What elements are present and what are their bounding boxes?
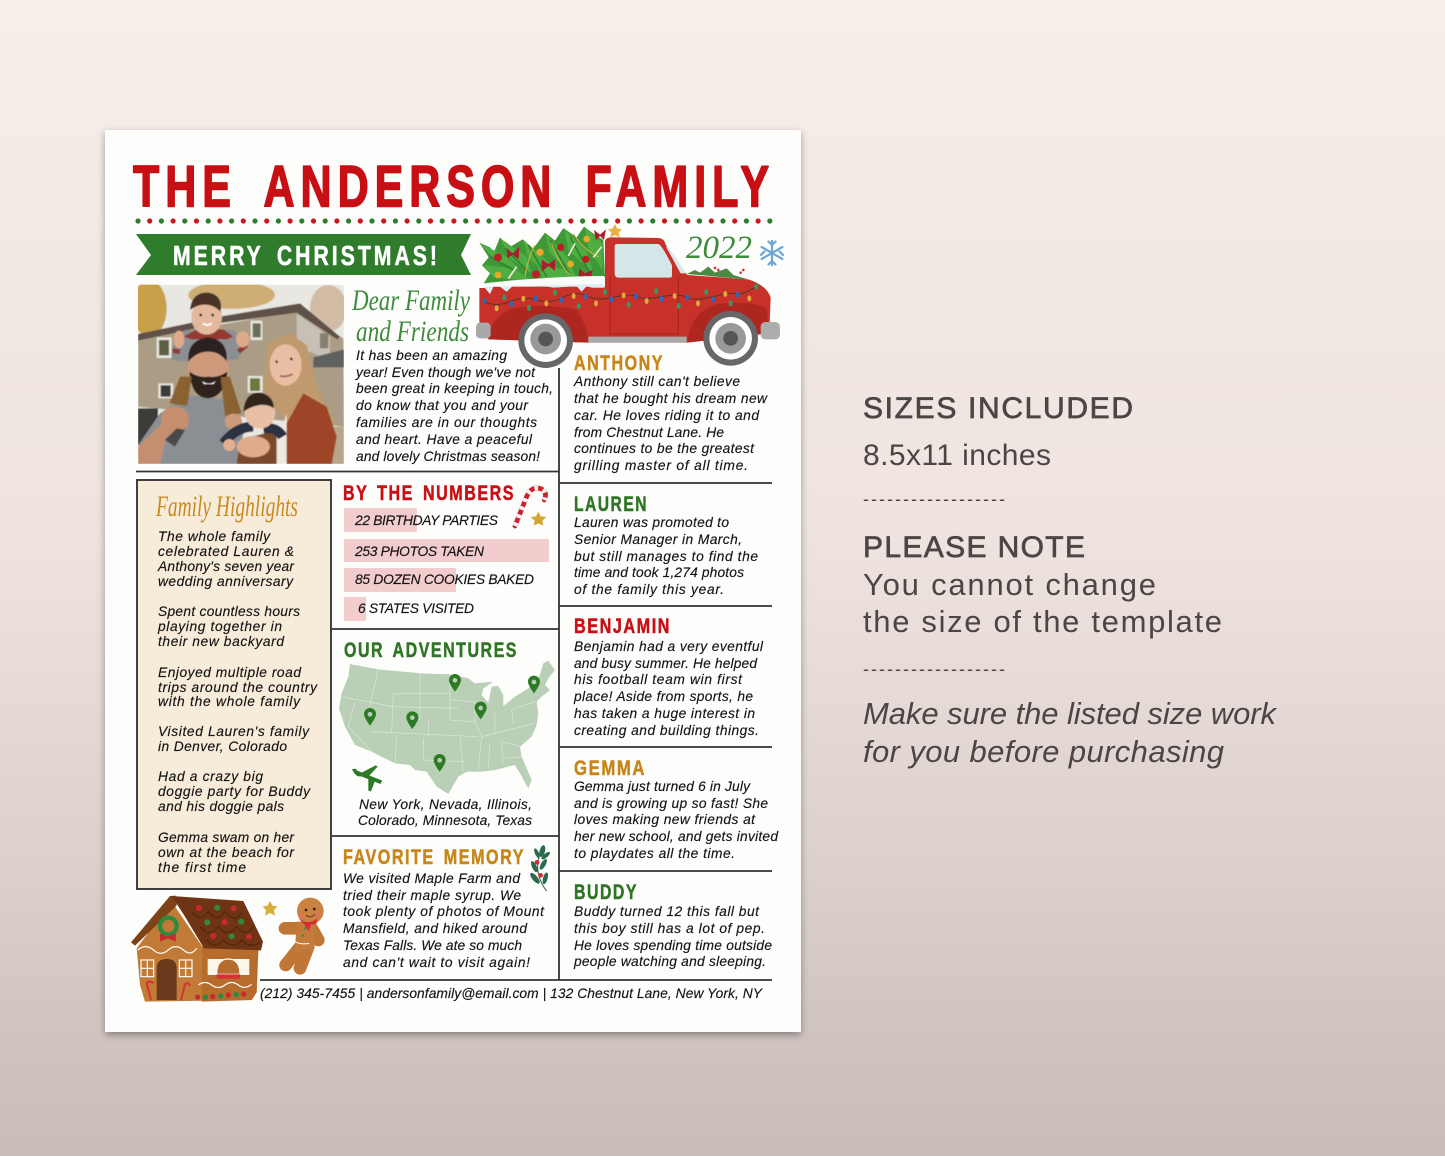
heading: gemma: GEMMA (574, 757, 646, 780)
text block: highlights: doggie party for Buddy (158, 784, 311, 799)
text block: benjamin (573, 639, 764, 738)
text block: lauren (574, 515, 758, 597)
text block: highlights: Gemma swam on her (158, 830, 295, 845)
text block: benjamin: creating and building things. (574, 723, 759, 738)
text block: highlights: celebrated Lauren & (158, 544, 294, 559)
text block: lauren: time and took 1,274 photos (574, 565, 744, 580)
text block: memory: Texas Falls. We ate so much (343, 938, 522, 953)
text block: highlights: Had a crazy big (158, 769, 263, 784)
text block: lauren: Senior Manager in March, (574, 532, 742, 547)
text block: anthony: grilling master of all time. (574, 458, 748, 473)
dotted divider (135, 218, 772, 224)
panel dividers (136, 368, 772, 980)
text block: memory: We visited Maple Farm and (343, 871, 521, 886)
newsletter paper (105, 130, 801, 1032)
text block: highlights: own at the beach for (158, 845, 295, 860)
star (608, 224, 622, 237)
text block: gemma: and is growing up so fast! She (574, 796, 768, 811)
text block: letter: and lovely Christmas season! (356, 449, 540, 464)
hood garland (687, 267, 748, 279)
text block: highlights (157, 529, 318, 875)
text block: letter: do know that you and your (356, 398, 529, 413)
child legs (169, 377, 192, 406)
text block: letter (355, 348, 553, 464)
text block: benjamin: Benjamin had a very eventful (574, 639, 764, 654)
heading: family highlights: Family Highlights (155, 490, 298, 523)
text block: highlights: wedding anniversary (158, 574, 294, 589)
text block: highlights: and his doggie pals (158, 799, 284, 814)
text block: gemma: loves making new friends at (574, 812, 756, 827)
heading: dear family and friends (351, 284, 471, 348)
tree on truck (479, 227, 606, 284)
text: purchase warning: for you before purchasing (863, 734, 1224, 769)
panel: lauren (574, 493, 758, 597)
woman (263, 333, 335, 423)
text block: buddy: Buddy turned 12 this fall but (574, 904, 760, 919)
text block: letter: year! Even though we've not (355, 365, 536, 380)
panel: by the numbers (343, 482, 549, 621)
icon: airplane (352, 765, 382, 791)
text: note (863, 567, 1222, 639)
truck body (479, 237, 771, 343)
text block: anthony: Anthony still can't believe (573, 374, 740, 389)
text block: highlights: Spent countless hours (158, 604, 300, 619)
photo: family (132, 280, 347, 464)
panel: family highlights (137, 480, 331, 889)
text block: highlights: playing together in (157, 619, 282, 634)
text block: memory: tried their maple syrup. We (343, 888, 521, 903)
text block: anthony: from Chestnut Lane. He (574, 425, 724, 440)
wheels (518, 311, 758, 368)
text block: lauren: of the family this year. (574, 582, 724, 597)
text block: memory (343, 871, 545, 970)
man shirt (138, 395, 245, 464)
text block: memory: Mansfield, and hiked around (343, 921, 528, 936)
text block: gemma: Gemma just turned 6 in July (574, 779, 751, 794)
text block: lauren: Lauren was promoted to (574, 515, 729, 530)
panel: our adventures (339, 639, 555, 828)
lights (483, 284, 758, 311)
text block: gemma: to playdates all the time. (574, 846, 735, 861)
text: note: the size of the template (863, 604, 1222, 639)
panel: sizes info: ------------------ (863, 489, 1005, 509)
footer contact line: (212) 345-7455 | andersonfamily@email.com | 132 Chestnut Lane, New York, NY (260, 986, 764, 1001)
title: THE ANDERSON FAMILY (133, 154, 775, 220)
text block: highlights: Anthony's seven year (157, 559, 295, 574)
text block: anthony: continues to be the greatest (574, 441, 755, 456)
text block: benjamin: and busy summer. He helped (574, 656, 758, 671)
text block: highlights: Visited Lauren's family (158, 724, 310, 739)
baby (237, 430, 277, 464)
banner: merry christmas (136, 234, 471, 275)
text block: highlights: in Denver, Colorado (158, 739, 287, 754)
star (263, 901, 278, 916)
heading: dear family and friends: and Friends (356, 315, 469, 348)
heading: by the numbers: BY THE NUMBERS (343, 482, 515, 505)
panel: favorite memory (343, 845, 551, 970)
heading: favorite memory: FAVORITE MEMORY (343, 846, 525, 869)
year 2022: 2022 (686, 230, 752, 266)
text block: buddy (573, 904, 772, 969)
panel: buddy (573, 881, 772, 969)
text block: highlights: their new backyard (158, 634, 285, 649)
icon: candy cane (515, 488, 546, 526)
heading: lauren: LAUREN (574, 493, 648, 516)
text block: benjamin: his football team win first (574, 672, 743, 687)
panel: sizes info (863, 392, 1278, 769)
text: note: You cannot change (863, 567, 1156, 602)
text block: gemma: her new school, and gets invited (574, 829, 779, 844)
banner: merry christmas: MERRY CHRISTMAS! (173, 240, 440, 271)
heading: benjamin: BENJAMIN (574, 615, 671, 638)
icon: gingerbread man (285, 898, 324, 968)
bar chart (344, 508, 549, 621)
text block: buddy: people watching and sleeping. (573, 954, 766, 969)
text block: states (358, 797, 532, 828)
snow (479, 276, 604, 294)
heading: please note: PLEASE NOTE (863, 531, 1085, 564)
man head (187, 350, 230, 386)
text block: states: New York, Nevada, Illinois, (359, 797, 532, 812)
icon: holly sprig (529, 845, 551, 891)
text block: states: Colorado, Minnesota, Texas (358, 813, 532, 828)
text: size: 8.5x11 inches (863, 439, 1051, 472)
windows (615, 244, 672, 278)
fenders (488, 303, 769, 343)
text block: memory: took plenty of photos of Mount (343, 904, 545, 919)
bar chart: 22 BIRTHDAY PARTIES (354, 513, 499, 528)
child torso (172, 330, 247, 362)
panel: sizes info: ------------------ (863, 659, 1005, 679)
text block: buddy: this boy still has a lot of pep. (574, 921, 765, 936)
text block: highlights: the first time (158, 860, 246, 875)
heading: our adventures: OUR ADVENTURES (344, 639, 518, 662)
map pins (364, 674, 540, 772)
text block: letter: and heart. Have a peaceful (356, 432, 533, 447)
text block: letter: families are in our thoughts (356, 415, 537, 430)
bar chart: 253 PHOTOS TAKEN (354, 544, 484, 559)
text block: lauren: but still manages to find the (574, 549, 758, 564)
text block: memory: and can't wait to visit again! (343, 955, 530, 970)
heading: dear family and friends: Dear Family (351, 284, 471, 317)
text: purchase warning (863, 696, 1278, 769)
bar chart: 85 DOZEN COOKIES BAKED (355, 572, 534, 587)
heading: sizes included: SIZES INCLUDED (863, 392, 1133, 425)
light string (483, 287, 757, 304)
text block: highlights: The whole family (158, 529, 271, 544)
heading: buddy: BUDDY (574, 881, 638, 904)
text block: letter: been great in keeping in touch, (356, 381, 553, 396)
text block: benjamin: place! Aside from sports, he (573, 689, 753, 704)
bar chart: 6 STATES VISITED (358, 601, 474, 616)
text block: anthony: car. He loves riding it to and (574, 408, 760, 423)
text block: benjamin: has taken a huge interest in (574, 706, 755, 721)
map: united states (339, 661, 555, 794)
text block: highlights: Enjoyed multiple road (158, 665, 302, 680)
text block: highlights: with the whole family (158, 694, 301, 709)
panel: anthony (573, 352, 768, 473)
text block: highlights: trips around the country (158, 680, 318, 695)
text: purchase warning: Make sure the listed size work (863, 696, 1278, 731)
bumpers (476, 323, 491, 338)
text block: buddy: He loves spending time outside (574, 938, 772, 953)
panel: gemma (574, 757, 779, 861)
text block: anthony (573, 374, 768, 473)
icon: snowflake (761, 241, 783, 265)
text block: gemma (574, 779, 779, 861)
icon: gingerbread house (131, 896, 324, 1002)
heading: anthony: ANTHONY (574, 352, 664, 375)
panel: benjamin (573, 615, 764, 738)
text block: anthony: that he bought his dream new (574, 391, 768, 406)
text block: letter: It has been an amazing (356, 348, 507, 363)
icon: red truck with christmas tree (476, 224, 780, 368)
